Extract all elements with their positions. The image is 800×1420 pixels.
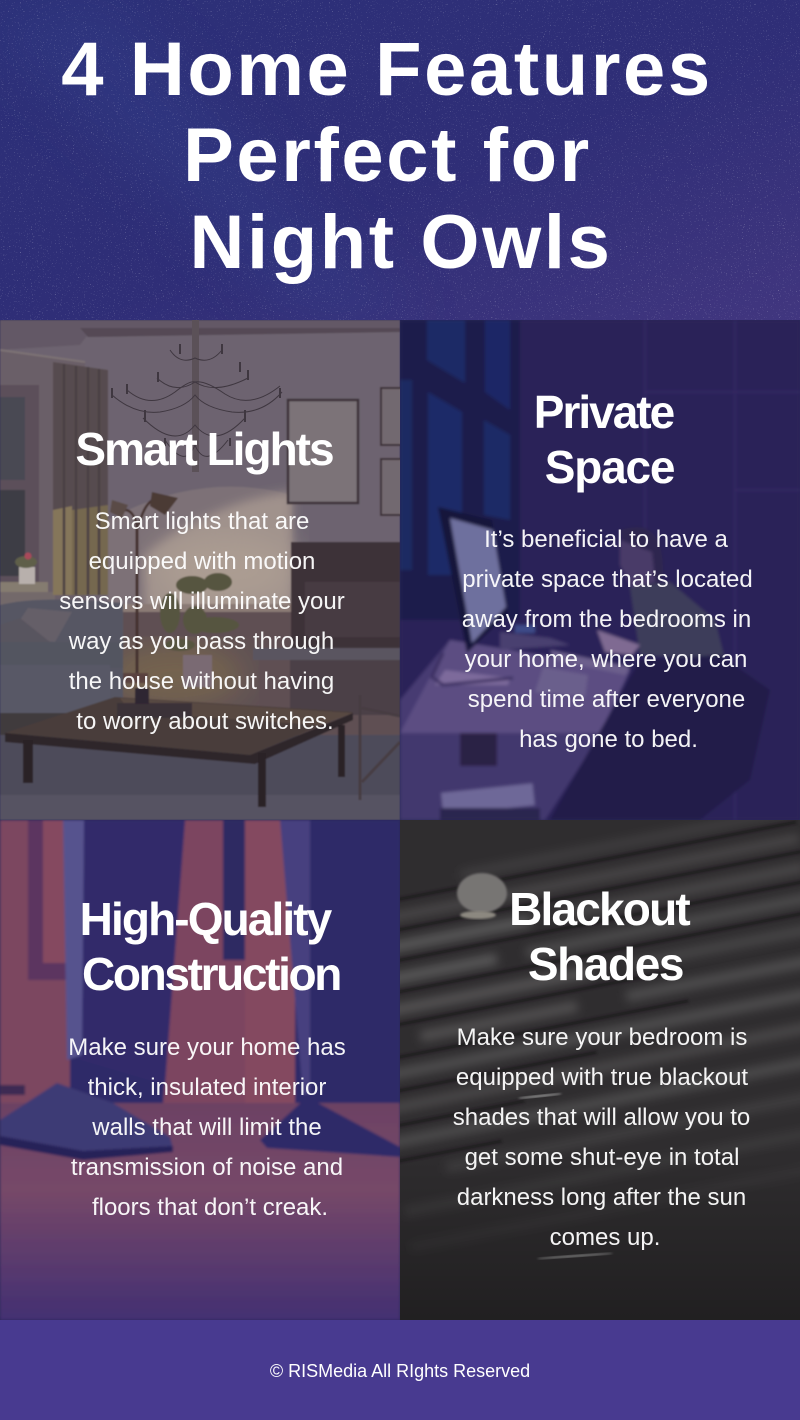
body: High-Quality Construction description	[68, 1034, 346, 1221]
body: Private Space description: away from the bedrooms in	[462, 606, 751, 633]
body: Smart Lights description: sensors will illuminate your	[59, 588, 345, 615]
body: Private Space description: spend time after everyone	[468, 686, 745, 713]
body: Smart Lights description: equipped with motion	[89, 548, 315, 575]
body: High-Quality Construction description: walls that will limit the	[92, 1114, 322, 1141]
heading: High-Quality Construction	[80, 893, 340, 1000]
footer bar	[0, 1320, 800, 1420]
text block: Private Space	[462, 386, 753, 753]
heading: Smart Lights: Smart Lights	[75, 423, 333, 475]
body: Private Space description: your home, where you can	[465, 646, 747, 673]
heading: Blackout Shades: Blackout	[509, 883, 689, 935]
body: Smart Lights description	[59, 508, 345, 735]
body: Blackout Shades description: Make sure your bedroom is	[457, 1024, 747, 1051]
body: Blackout Shades description	[453, 1024, 750, 1251]
body: Smart Lights description: way as you pass through	[69, 628, 334, 655]
body: Blackout Shades description: comes up.	[550, 1224, 660, 1251]
heading: Blackout Shades	[509, 883, 690, 990]
body: Smart Lights description: the house without having	[69, 668, 334, 695]
heading: Private Space: Private	[534, 386, 673, 438]
heading: High-Quality Construction: Construction	[82, 948, 340, 1000]
heading: Blackout Shades: Shades	[528, 938, 683, 990]
text block: Smart Lights	[59, 423, 345, 735]
body: Private Space description: has gone to bed.	[519, 726, 698, 753]
title: 4 Home Features	[61, 27, 713, 112]
desk	[400, 640, 630, 820]
title: Perfect for	[183, 113, 592, 198]
body: Smart Lights description: to worry about switches.	[76, 708, 334, 735]
body: Blackout Shades description: shades that will allow you to	[453, 1104, 750, 1131]
monitor	[438, 507, 508, 653]
body: Smart Lights description: Smart lights that are	[95, 508, 309, 535]
icon: chandelier	[112, 320, 282, 472]
body: Blackout Shades description: equipped with true blackout	[456, 1064, 748, 1091]
text block: Blackout Shades	[453, 883, 750, 1251]
body: High-Quality Construction description: Make sure your home has	[68, 1034, 346, 1061]
title: Night Owls	[190, 200, 612, 285]
panel: High-Quality Construction photo	[0, 820, 400, 1320]
panel: header starry sky	[0, 0, 800, 320]
title	[61, 27, 713, 285]
body: Blackout Shades description: darkness long after the sun	[457, 1184, 746, 1211]
body: High-Quality Construction description: thick, insulated interior	[88, 1074, 326, 1101]
footer copyright text: © RISMedia All RIghts Reserved	[270, 1361, 530, 1381]
heading: Private Space: Space	[545, 441, 674, 493]
heading: High-Quality Construction: High-Quality	[80, 893, 330, 945]
body: High-Quality Construction description: floors that don’t creak.	[92, 1194, 328, 1221]
body: High-Quality Construction description: transmission of noise and	[71, 1154, 343, 1181]
body: Private Space description	[462, 526, 753, 753]
panel: Private Space photo	[400, 320, 770, 820]
body: Private Space description: private space that’s located	[462, 566, 753, 593]
panel: Blackout Shades photo	[400, 820, 800, 1320]
panel: Smart Lights photo	[0, 320, 400, 820]
person	[620, 527, 663, 590]
heading: Private Space	[534, 386, 674, 493]
text block: High-Quality Construction	[68, 893, 346, 1221]
body: Blackout Shades description: get some shut-eye in total	[465, 1144, 739, 1171]
body: Private Space description: It’s beneficial to have a	[484, 526, 728, 553]
